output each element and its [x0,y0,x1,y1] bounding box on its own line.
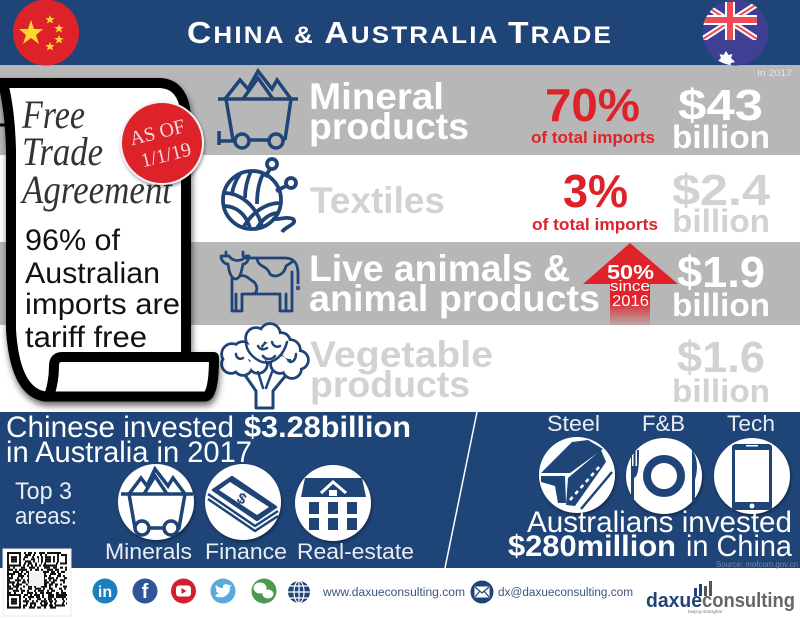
text: 96 percent tariff free: imports are [25,288,180,321]
stat: 70 percent: of total imports [531,128,655,147]
logo: daxue consulting: beijing shanghai [688,609,722,614]
labels: Australian sectors: Tech [727,411,775,436]
website: www.daxueconsulting.com [322,587,465,599]
band: live animals [0,242,800,325]
text: top 3 areas: Top 3 [15,478,72,505]
arrow: up 50 percent since 2016: 50% [607,262,654,284]
labels: Australian sectors [547,411,775,436]
value: 1.6 billion: billion [672,373,770,409]
stat: 70 percent: 70% [545,79,640,131]
icon: minerals [118,464,194,540]
icon: globe [288,581,310,603]
icon: finance [205,464,281,540]
value: 1.9 billion: billion [672,287,770,323]
icon: yarn ball [223,159,296,232]
icon: wechat [252,578,276,604]
script heading [19,92,173,212]
QR code [3,549,71,616]
heading: Chinese invested [6,411,411,469]
panel: investment [0,412,800,568]
text: top 3 areas: areas: [15,503,77,530]
icon: tech [714,438,790,514]
divider [445,412,477,568]
icon: linkedin: in [98,584,112,601]
icon: China flag [13,0,79,66]
title: CHINA & AUSTRALIA TRADE [187,15,613,50]
row: mineral products [218,71,770,155]
heading: Chinese invested: Chinese invested [6,411,234,444]
labels: top areas: Finance [205,539,287,564]
badge: as of 1/1/19: AS OF [128,115,187,150]
label: mineral products: Mineral [309,76,444,117]
label: vegetable products: Vegetable [310,334,493,375]
labels: top areas [105,539,414,564]
row: textiles [223,159,771,239]
icon: real estate [295,465,371,541]
stat: 3 percent: of total imports [532,215,658,234]
icon: cow [221,252,299,311]
script heading: Free [21,92,85,137]
script heading: Trade [22,129,103,174]
value: 2.4 billion: billion [672,203,770,239]
row: live animals [221,243,770,326]
text: top 3 areas [15,478,77,530]
arrow: up 50 percent since 2016: since [610,278,650,295]
icon: youtube [171,578,196,604]
year note: In 2017 [757,68,792,79]
value: 1.6 billion [672,333,770,409]
labels: Australian sectors: Steel [547,411,600,436]
value: 2.4 billion [672,166,771,239]
badge: as of 1/1/19: 1/1/19 [139,139,194,172]
value: 1.9 billion [672,248,770,323]
stat: 70 percent [531,79,655,147]
row: vegetable products [223,325,770,409]
badge: as of 1/1/19 [121,102,203,184]
panel: free trade agreement scroll [0,83,214,396]
labels: top areas: Real-estate [297,539,414,564]
text: 96 percent tariff free: 96% of [25,224,121,257]
text: 96 percent tariff free: tariff free [25,321,147,354]
arrow: up 50 percent since 2016 [583,243,678,326]
footer: social icons [92,578,310,604]
logo: daxue consulting [646,581,795,614]
stat: 3 percent [532,165,658,234]
icon: mine cart [218,71,298,148]
script heading: Agreement [19,167,173,212]
label: textiles: Textiles [310,180,445,221]
label: live animals: animal products [309,278,600,319]
icon: linkedin [92,578,118,604]
heading: Australians invested [508,506,792,563]
icon: steel [539,437,615,513]
icon: facebook [132,578,158,604]
icon: finance: $ [234,490,250,509]
icon: broccoli [223,325,307,408]
value: 43 billion [672,81,770,155]
heading: Australians invested: in China [686,530,792,563]
arrow: up 50 percent since 2016: 2016 [612,293,649,310]
scroll shape [0,83,214,396]
label: live animals: Live animals & [309,248,570,289]
logo: daxue consulting: daxue [646,590,702,612]
text: 96 percent tariff free: Australian [25,257,160,290]
heading: Australians invested: $280million [508,530,676,563]
value: 43 billion: billion [672,119,770,155]
stat: 3 percent: 3% [563,165,628,217]
label: live animals [309,248,600,319]
icon: food and beverage [626,438,702,514]
value: 43 billion: $43 [678,81,763,130]
heading: Chinese invested: in Australia in 2017 [6,436,252,469]
text: 96 percent tariff free [25,224,180,354]
value: 1.6 billion: $1.6 [677,333,765,382]
band: mineral products [0,65,800,155]
email: dx@daxueconsulting.com [498,587,633,599]
labels: Australian sectors: F&B [642,411,685,436]
label: vegetable products [310,334,493,405]
label: mineral products [309,76,469,147]
icon: twitter [210,578,236,604]
value: 2.4 billion: $2.4 [672,166,771,215]
labels: top areas: Minerals [105,539,192,564]
header bar [0,0,800,65]
label: mineral products: products [309,106,469,147]
icon: Australia flag [700,0,768,67]
heading: Australians invested: Australians invested [527,506,792,539]
value: 1.9 billion: $1.9 [677,248,765,297]
heading: Chinese invested: $3.28billion [244,411,411,444]
label: vegetable products: products [310,364,470,405]
icon: mail [470,580,494,604]
source note: Source: mofcom.gov.cn [716,560,798,569]
icon: facebook: f [142,581,149,603]
